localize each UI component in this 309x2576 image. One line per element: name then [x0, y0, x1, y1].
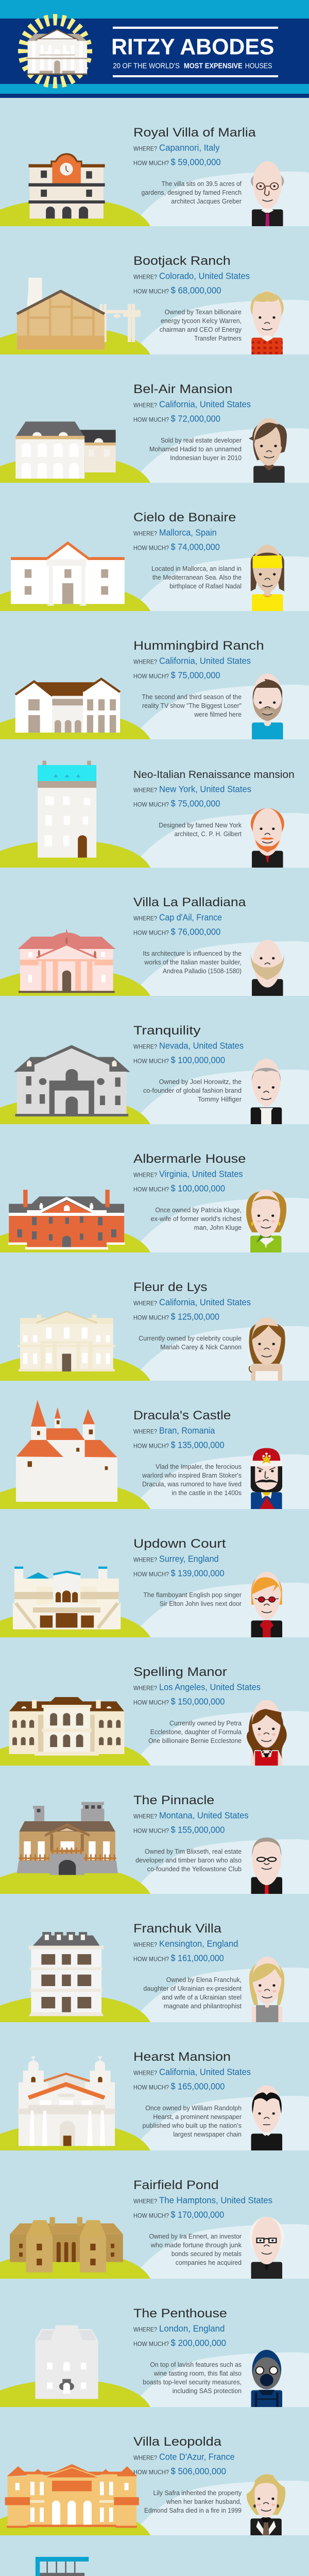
- where: Cap d'Ail, France: [159, 912, 222, 923]
- description: Mohamed Hadid to an unnamed: [149, 446, 242, 453]
- where: WHERE?: [133, 145, 157, 152]
- how much: [133, 2338, 226, 2348]
- description: The second and third season of the: [142, 693, 242, 701]
- description: when her banker husband,: [166, 2498, 242, 2505]
- description: Indonesian buyer in 2010: [170, 454, 242, 462]
- text block: [133, 1793, 249, 1873]
- owner portrait: [251, 161, 284, 226]
- title: Bootjack Ranch: [133, 254, 231, 268]
- where: [133, 912, 222, 923]
- description: Vlad the Impaler, the ferocious: [156, 1463, 242, 1470]
- description: energy tycoon Kelcy Warren,: [161, 317, 242, 325]
- description: including SAS protection: [173, 2387, 242, 2395]
- description: [142, 2105, 242, 2138]
- building: The Penthouse: [35, 2325, 98, 2399]
- where: Bran, Romania: [159, 1426, 215, 1436]
- where: Cote D'Azur, France: [159, 2452, 235, 2462]
- owner portrait: [249, 1317, 285, 1381]
- how much: $ 74,000,000: [171, 542, 220, 552]
- how much: HOW MUCH?: [133, 2469, 169, 2476]
- building: Fairfield Pond: [10, 2217, 123, 2273]
- owner portrait: [247, 2474, 285, 2535]
- description: Hearst, a prominent newspaper: [153, 2113, 242, 2121]
- description: Designed by famed New York: [159, 822, 242, 829]
- owner portrait: [249, 418, 287, 483]
- description: [143, 1078, 242, 1103]
- description: magnate and philantrophist: [164, 2003, 242, 2010]
- building: Villa Leopolda: [5, 2464, 139, 2528]
- description: daughter of Ukrainian ex-president: [143, 1985, 242, 1992]
- where: [133, 143, 220, 153]
- title: The Penthouse: [133, 2307, 227, 2320]
- description: published who built up the nation's: [142, 2122, 242, 2129]
- text block: [133, 639, 264, 718]
- where: Colorado, United States: [159, 271, 250, 281]
- where: California, United States: [159, 1297, 251, 1308]
- where: Surrey, England: [159, 1554, 219, 1564]
- how much: HOW MUCH?: [133, 2341, 169, 2348]
- text block: [133, 1024, 244, 1103]
- description: Owned by Ira Ennert, an investor: [149, 2233, 242, 2240]
- description: reality TV show "The Biggest Loser": [142, 702, 242, 709]
- how much: [133, 670, 220, 681]
- how much: [133, 1440, 225, 1450]
- how much: [133, 1825, 225, 1835]
- title: Updown Court: [133, 1537, 226, 1551]
- panel: Antilla: [0, 2557, 309, 2576]
- owner portrait: [251, 940, 284, 996]
- where: WHERE?: [133, 1556, 157, 1564]
- title: Albermarle House: [133, 1152, 246, 1166]
- title: Fairfield Pond: [133, 2178, 219, 2192]
- how much: HOW MUCH?: [133, 288, 169, 295]
- description: developer and timber baron who also: [135, 1857, 242, 1864]
- owner portrait: [251, 808, 284, 868]
- panel: Villa Leopolda: [0, 2435, 309, 2535]
- description: Edmond Safra died in a fire in 1999: [144, 2507, 242, 2514]
- description: Owned by Texan billionaire: [165, 309, 242, 316]
- description: Owned by Joel Horowitz, the: [159, 1078, 242, 1086]
- description: [143, 2361, 242, 2395]
- building: Hummingbird Ranch: [15, 679, 120, 733]
- where: WHERE?: [133, 2070, 157, 2077]
- where: WHERE?: [133, 1685, 157, 1692]
- title: Cielo de Bonaire: [133, 511, 236, 524]
- owner portrait: [251, 2085, 282, 2150]
- owner portrait: [252, 673, 283, 739]
- how much: $ 72,000,000: [171, 414, 220, 424]
- title: Royal Villa of Marlia: [133, 126, 256, 140]
- how much: [133, 157, 221, 167]
- text block: [133, 254, 250, 342]
- icon: sunburst: [24, 20, 87, 82]
- how much: HOW MUCH?: [133, 1443, 169, 1450]
- title: Villa La Palladiana: [133, 895, 246, 909]
- description: [142, 180, 242, 205]
- title: Dracula's Castle: [133, 1409, 231, 1422]
- description: Currently owned by celebrity couple: [139, 1335, 242, 1342]
- how much: $ 155,000,000: [171, 1825, 225, 1835]
- text block: [133, 1922, 242, 2010]
- title: RITZY ABODES: [111, 34, 274, 59]
- text block: [133, 2435, 242, 2514]
- title: The Pinnacle: [133, 1793, 214, 1807]
- how much: HOW MUCH?: [133, 1827, 169, 1835]
- title: Fleur de Lys: [133, 1280, 207, 1294]
- how much: $ 161,000,000: [171, 1953, 224, 1963]
- where: WHERE?: [133, 1043, 157, 1050]
- how much: [133, 542, 220, 552]
- description: boasts top-level security measures,: [143, 2379, 242, 2386]
- how much: [133, 285, 221, 296]
- building: Bootjack Ranch: [17, 278, 141, 349]
- description: On top of lavish features such as: [150, 2361, 242, 2368]
- description: [135, 1848, 242, 1873]
- building: Fleur de Lys: [18, 1312, 115, 1371]
- where: California, United States: [159, 656, 251, 666]
- subtitle: 20 OF THE WORLD'S: [113, 61, 180, 70]
- building: Tranquility: [14, 1045, 130, 1116]
- building: Neo-Italian Renaissance mansion: [38, 761, 96, 858]
- panel: Cielo de Bonaire: [0, 511, 309, 611]
- how much: [133, 1568, 225, 1579]
- description: [139, 1335, 242, 1351]
- how much: [133, 414, 220, 424]
- description: were filmed here: [194, 711, 242, 718]
- how much: $ 75,000,000: [171, 670, 220, 681]
- how much: $ 165,000,000: [171, 2081, 225, 2092]
- description: [142, 693, 242, 718]
- description: [143, 1591, 242, 1607]
- text block: [133, 1280, 251, 1351]
- where: Nevada, United States: [159, 1041, 244, 1051]
- how much: HOW MUCH?: [133, 160, 169, 167]
- text block: [133, 511, 242, 590]
- how much: [133, 1183, 225, 1194]
- how much: $ 135,000,000: [171, 1440, 225, 1450]
- how much: HOW MUCH?: [133, 1699, 169, 1706]
- description: chairman and CEO of Energy: [160, 326, 242, 333]
- description: [142, 1463, 242, 1497]
- how much: $ 506,000,000: [171, 2466, 226, 2477]
- text block: [133, 1152, 246, 1231]
- description: Located in Mallorca, an island in: [151, 565, 242, 572]
- how much: $ 150,000,000: [171, 1697, 225, 1707]
- description: in the castle in the 1400s: [172, 1489, 242, 1497]
- where: WHERE?: [133, 1428, 157, 1435]
- where: [133, 2324, 225, 2334]
- owner portrait: [251, 545, 284, 611]
- building: Albermarle House: [8, 1190, 125, 1249]
- building: Dracula's Castle: [16, 1400, 117, 1502]
- how much: $ 170,000,000: [171, 2210, 224, 2220]
- description: ex-wife of former world's richest: [151, 1215, 242, 1223]
- building: Antilla: [36, 2557, 98, 2576]
- title: Franchuk Villa: [133, 1922, 221, 1936]
- description: The villa sits on 39.5 acres of: [162, 180, 242, 188]
- how much: [133, 1697, 225, 1707]
- text block: [133, 2178, 272, 2266]
- where: Los Angeles, United States: [159, 1682, 261, 1692]
- panel: Spelling Manor: [0, 1665, 309, 1766]
- how much: HOW MUCH?: [133, 2212, 169, 2219]
- owner portrait: [247, 1700, 287, 1766]
- description: and wife of a Ukrainian steel: [162, 1994, 242, 2001]
- text block: [133, 382, 251, 462]
- where: Montana, United States: [159, 1810, 249, 1821]
- panel: Bel-Air Mansion: [0, 382, 309, 483]
- header banner: [0, 0, 309, 98]
- panel: Hearst Mansion: [0, 2050, 309, 2150]
- how much: HOW MUCH?: [133, 1314, 169, 1321]
- panel: Tranquility: [0, 1024, 309, 1124]
- where: New York, United States: [159, 784, 251, 794]
- where: The Hamptons, United States: [159, 2195, 272, 2206]
- panel: Albermarle House: [0, 1152, 309, 1252]
- building: Cielo de Bonaire: [11, 543, 125, 606]
- title: Villa Leopolda: [133, 2435, 221, 2449]
- description: Its architecture is influenced by the: [143, 950, 242, 957]
- description: Transfer Partners: [194, 335, 242, 342]
- building: Royal Villa of Marlia: [28, 153, 105, 218]
- how much: [133, 2081, 225, 2092]
- how much: $ 100,000,000: [171, 1055, 225, 1065]
- icon: white mansion: [26, 29, 88, 75]
- description: co-founded the Yellowstone Club: [147, 1866, 242, 1873]
- title: Tranquility: [133, 1024, 201, 1038]
- title: Bel-Air Mansion: [133, 382, 233, 396]
- how much: HOW MUCH?: [133, 801, 169, 808]
- subtitle: HOUSES: [245, 61, 272, 70]
- description: [144, 2489, 242, 2514]
- how much: HOW MUCH?: [133, 1571, 169, 1578]
- how much: HOW MUCH?: [133, 1186, 169, 1193]
- subtitle: [113, 61, 272, 70]
- owner portrait: [250, 291, 284, 354]
- how much: HOW MUCH?: [133, 1058, 169, 1065]
- how much: [133, 1055, 225, 1065]
- panel: Franchuk Villa: [0, 1922, 309, 2022]
- how much: HOW MUCH?: [133, 416, 169, 423]
- panel: Dracula's Castle: [0, 1400, 309, 1509]
- building: Villa La Palladiana: [18, 929, 115, 993]
- description: Once owned by Patricia Kluge,: [155, 1207, 242, 1214]
- description: bonds secured by metals: [171, 2250, 242, 2258]
- description: architect Jacques Greber: [171, 198, 242, 205]
- how much: $ 75,000,000: [171, 799, 220, 809]
- where: Kensington, England: [159, 1939, 238, 1949]
- description: birthplace of Rafael Nadal: [169, 583, 242, 590]
- building: The Pinnacle: [17, 1802, 118, 1875]
- text block: [133, 1665, 261, 1744]
- where: WHERE?: [133, 915, 157, 922]
- how much: HOW MUCH?: [133, 673, 169, 680]
- where: [133, 528, 217, 538]
- description: [159, 822, 242, 838]
- how much: [133, 927, 221, 937]
- where: WHERE?: [133, 787, 157, 794]
- where: Capannori, Italy: [159, 143, 220, 153]
- panel: Bootjack Ranch: [0, 254, 309, 354]
- description: co-founder of global fashion brand: [143, 1087, 242, 1094]
- description: warlord who inspired Bram Stoker's: [142, 1472, 242, 1479]
- panel: Updown Court: [0, 1537, 309, 1637]
- description: [148, 1720, 242, 1744]
- where: WHERE?: [133, 402, 157, 409]
- description: [143, 950, 242, 975]
- owner portrait: [251, 1572, 282, 1637]
- panel: Neo-Italian Renaissance mansion: [0, 761, 309, 868]
- how much: [133, 1312, 219, 1322]
- subtitle: MOST EXPENSIVE: [184, 61, 243, 70]
- where: WHERE?: [133, 2198, 157, 2205]
- panel: Royal Villa of Marlia: [0, 126, 309, 226]
- description: Sold by real estate developer: [161, 437, 242, 444]
- description: [151, 1207, 242, 1231]
- text block: [133, 126, 256, 205]
- how much: [133, 799, 220, 809]
- where: WHERE?: [133, 530, 157, 537]
- text block: [133, 1409, 242, 1497]
- building: Spelling Manor: [9, 1697, 124, 1756]
- panel: The Pinnacle: [0, 1793, 309, 1894]
- where: WHERE?: [133, 1172, 157, 1179]
- where: Virginia, United States: [159, 1169, 243, 1179]
- text block: [133, 769, 295, 838]
- title: Neo-Italian Renaissance mansion: [133, 769, 295, 781]
- where: WHERE?: [133, 2326, 157, 2333]
- decorative rule: [113, 27, 278, 29]
- owner portrait: [249, 1957, 284, 2022]
- description: One billionaire Bernie Ecclestone: [148, 1737, 242, 1744]
- text block: [133, 2307, 242, 2395]
- description: Ecclestone, daughter of Formula: [150, 1728, 242, 1736]
- where: WHERE?: [133, 1941, 157, 1948]
- panel: The Penthouse: [0, 2307, 309, 2407]
- panel: Villa La Palladiana: [0, 895, 309, 996]
- how much: [133, 1953, 224, 1963]
- panel: Fairfield Pond: [0, 2178, 309, 2279]
- description: Owned by Tim Blixseth, real estate: [145, 1848, 242, 1855]
- how much: [133, 2466, 226, 2477]
- description: works of the Italian master builder,: [144, 959, 242, 966]
- how much: HOW MUCH?: [133, 1956, 169, 1963]
- building: Updown Court: [13, 1567, 121, 1630]
- how much: $ 125,00,000: [171, 1312, 219, 1322]
- description: largest newspaper chain: [173, 2131, 242, 2138]
- description: Once owned by William Randolph: [145, 2105, 242, 2112]
- description: [160, 309, 242, 342]
- description: wine tasting room, this flat also: [153, 2370, 242, 2377]
- description: Andrea Palladio (1508-1580): [163, 968, 242, 975]
- where: WHERE?: [133, 1813, 157, 1820]
- building: Hearst Mansion: [18, 2057, 115, 2146]
- description: companies he acquired: [176, 2259, 242, 2266]
- description: Tommy Hilfiger: [198, 1096, 242, 1103]
- title: Spelling Manor: [133, 1665, 227, 1679]
- text block: [133, 1537, 242, 1607]
- description: gardens, designed by famed French: [142, 189, 242, 196]
- building: Bel-Air Mansion: [15, 421, 116, 479]
- description: architect, C. P. H. Gilbert: [174, 831, 242, 838]
- title: Hummingbird Ranch: [133, 639, 264, 653]
- description: Owned by Elena Franchuk,: [166, 1976, 242, 1984]
- description: Sir Elton John lives next door: [160, 1600, 242, 1607]
- how much: $ 100,000,000: [171, 1183, 225, 1194]
- owner portrait: [249, 2217, 284, 2279]
- description: Lily Safra inherited the property: [153, 2489, 242, 2497]
- where: WHERE?: [133, 2454, 157, 2462]
- decorative rule: [113, 75, 278, 77]
- how much: $ 68,000,000: [171, 285, 221, 296]
- description: [151, 565, 242, 590]
- where: [133, 1554, 219, 1564]
- owner portrait: [246, 1190, 286, 1252]
- description: [149, 2233, 242, 2266]
- description: The flamboyant English pop singer: [143, 1591, 242, 1599]
- description: man, John Kluge: [194, 1224, 242, 1231]
- owner portrait: [251, 1059, 282, 1124]
- where: [133, 1426, 215, 1436]
- description: who made fortune through junk: [150, 2242, 242, 2249]
- how much: HOW MUCH?: [133, 2084, 169, 2091]
- description: the Mediterranean Sea. Also the: [152, 574, 242, 581]
- description: Mariah Carey & Nick Cannon: [160, 1344, 242, 1351]
- how much: HOW MUCH?: [133, 545, 169, 552]
- how much: HOW MUCH?: [133, 929, 169, 937]
- how much: $ 76,000,000: [171, 927, 221, 937]
- description: Currently owned by Petra: [169, 1720, 242, 1727]
- where: WHERE?: [133, 274, 157, 281]
- where: California, United States: [159, 399, 251, 410]
- description: Dracula, was rumored to have lived: [142, 1481, 242, 1488]
- where: WHERE?: [133, 658, 157, 666]
- text block: [133, 2050, 251, 2138]
- description: [143, 1976, 242, 2010]
- how much: $ 59,000,000: [171, 157, 221, 167]
- panel: Hummingbird Ranch: [0, 639, 309, 739]
- how much: [133, 2210, 224, 2220]
- text block: [133, 895, 246, 975]
- panel: Fleur de Lys: [0, 1280, 309, 1381]
- how much: $ 139,000,000: [171, 1568, 225, 1579]
- where: London, England: [159, 2324, 225, 2334]
- description: [149, 437, 242, 462]
- title: Hearst Mansion: [133, 2050, 231, 2064]
- where: WHERE?: [133, 1300, 157, 1307]
- where: California, United States: [159, 2067, 251, 2077]
- where: Mallorca, Spain: [159, 528, 217, 538]
- owner portrait: [251, 2350, 282, 2407]
- owner portrait: [251, 1448, 282, 1509]
- how much: $ 200,000,000: [171, 2338, 226, 2348]
- owner portrait: [251, 1838, 282, 1894]
- building: Franchuk Villa: [29, 1932, 104, 2016]
